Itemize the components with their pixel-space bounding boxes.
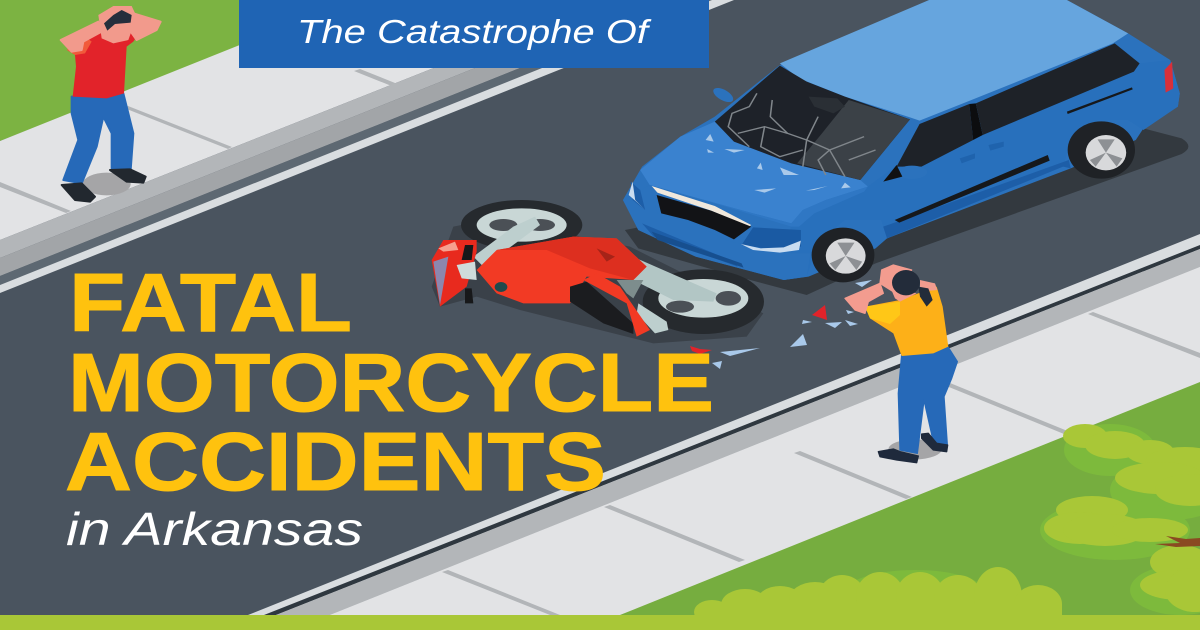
bottom grass strip	[0, 615, 1200, 630]
car	[623, 0, 1188, 295]
bottom-right sidewalk and grass	[248, 234, 1200, 630]
headline: FATAL	[69, 256, 352, 349]
person: woman in yellow shirt	[845, 265, 957, 463]
subheading: in Arkansas	[66, 503, 363, 555]
headline	[65, 256, 714, 508]
person: man in red shirt	[61, 6, 161, 202]
debris	[690, 280, 872, 369]
headline: ACCIDENTS	[65, 415, 606, 508]
top-left grass and sidewalk	[0, 0, 734, 293]
tree branch	[1155, 536, 1200, 547]
title banner: The Catastrophe Of	[297, 13, 653, 50]
title banner	[239, 0, 709, 68]
motorcycle	[432, 200, 764, 343]
bushes	[694, 424, 1200, 627]
headline: MOTORCYCLE	[68, 336, 714, 429]
